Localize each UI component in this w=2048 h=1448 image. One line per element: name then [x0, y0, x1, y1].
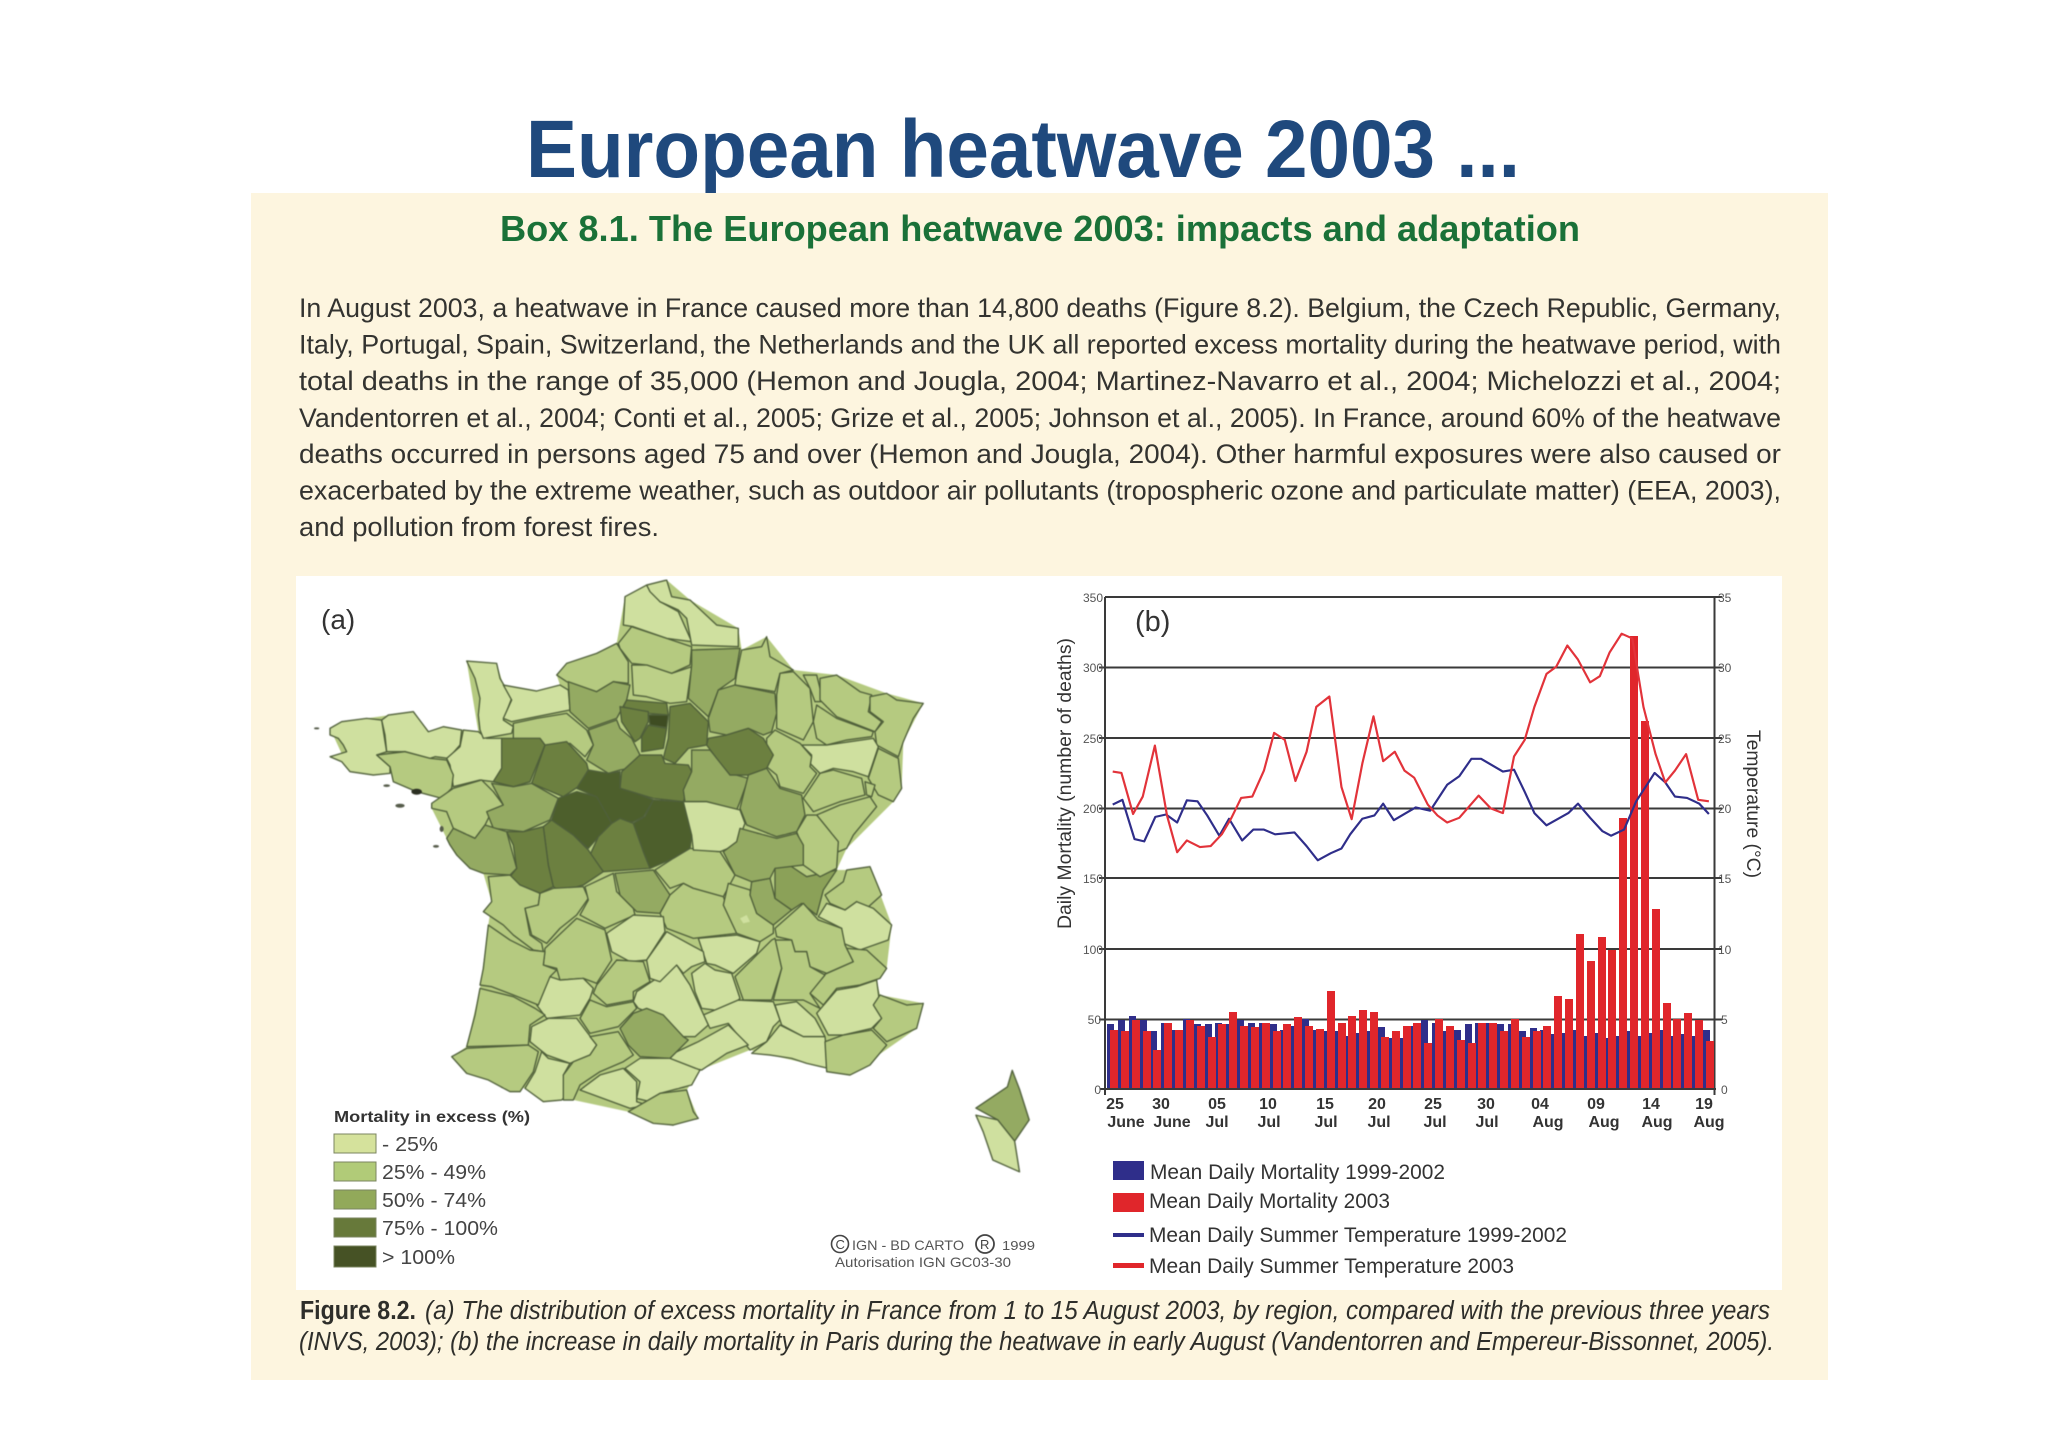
- x axis labels: 14: [1642, 1096, 1660, 1113]
- line: temperature 1999-2002: [1113, 759, 1709, 860]
- figure caption: [299, 1297, 1774, 1356]
- figure caption: (a) The distribution of excess mortality in France from 1 to 15 August 2003, by region, compared with the previous three years: [425, 1297, 1770, 1325]
- map of France: [314, 580, 1029, 1172]
- right axis tick labels: 20: [1718, 802, 1732, 816]
- copyright note: Autorisation IGN GC03-30: [835, 1254, 1011, 1270]
- x axis labels: Jul: [1367, 1114, 1391, 1131]
- x axis labels: 09: [1587, 1096, 1605, 1113]
- chart legend: Mean Daily Mortality 1999-2002: [1150, 1161, 1445, 1184]
- x axis labels: 25: [1424, 1096, 1442, 1113]
- copyright note: R: [980, 1237, 989, 1252]
- left axis tick labels: 0: [1094, 1083, 1101, 1097]
- panel: figure background: [296, 576, 1782, 1290]
- right axis tick labels: [1718, 591, 1732, 1097]
- x axis labels: Jul: [1423, 1114, 1447, 1131]
- x axis labels: Jul: [1475, 1114, 1499, 1131]
- x axis labels: June: [1107, 1114, 1145, 1131]
- bars: mean daily mortality 2003: [1110, 636, 1714, 1089]
- right axis tick labels: 25: [1718, 732, 1732, 746]
- copyright note: [832, 1235, 1035, 1270]
- body text: Vandentorren et al., 2004; Conti et al., 2005; Grize et al., 2005; Johnson et al., 2005). In France, around 60% of the heatwave: [299, 403, 1781, 433]
- right axis title: Temperature (°C): [1742, 730, 1763, 878]
- x axis labels: June: [1153, 1114, 1191, 1131]
- left axis tick labels: 150: [1083, 872, 1103, 886]
- x axis labels: 15: [1316, 1096, 1334, 1113]
- body text: In August 2003, a heatwave in France caused more than 14,800 deaths (Figure 8.2). Belgium, the Czech Republic, Germany,: [299, 293, 1781, 323]
- map legend: [334, 1109, 530, 1269]
- chart legend: Mean Daily Summer Temperature 2003: [1149, 1255, 1514, 1278]
- x axis labels: 30: [1477, 1096, 1495, 1113]
- x axis labels: Jul: [1257, 1114, 1281, 1131]
- box heading: Box 8.1. The European heatwave 2003: impacts and adaptation: [500, 208, 1580, 249]
- body text: deaths occurred in persons aged 75 and over (Hemon and Jougla, 2004). Other harmful exposures were also caused or: [299, 439, 1781, 469]
- chart legend: Mean Daily Mortality 2003: [1149, 1190, 1390, 1213]
- left axis tick labels: [1083, 591, 1103, 1097]
- panel label (a): (a): [321, 604, 355, 635]
- x axis labels: [1106, 1096, 1725, 1131]
- left axis tick labels: 50: [1088, 1013, 1101, 1027]
- x axis labels: 30: [1152, 1096, 1170, 1113]
- left axis tick labels: 350: [1083, 591, 1103, 605]
- line: temperature 2003: [1113, 634, 1709, 852]
- x axis labels: Jul: [1205, 1114, 1229, 1131]
- x axis labels: Aug: [1532, 1114, 1564, 1131]
- body text: total deaths in the range of 35,000 (Hemon and Jougla, 2004; Martinez-Navarro et al., 2004; Michelozzi et al., 2004;: [299, 366, 1781, 396]
- chart: daily mortality and temperature: [1055, 591, 1763, 1131]
- left axis tick labels: 250: [1083, 732, 1103, 746]
- body text: [299, 293, 1781, 542]
- x axis labels: 05: [1208, 1096, 1226, 1113]
- right axis tick labels: 35: [1718, 591, 1732, 605]
- map legend: 50% - 74%: [382, 1190, 486, 1212]
- x axis labels: Jul: [1314, 1114, 1338, 1131]
- body text: Italy, Portugal, Spain, Switzerland, the Netherlands and the UK all reported excess mortality during the heatwave period, with: [299, 330, 1781, 360]
- left axis tick labels: 300: [1083, 661, 1103, 675]
- copyright note: IGN - BD CARTO: [852, 1237, 964, 1253]
- copyright note: C: [836, 1237, 845, 1252]
- right axis tick labels: 5: [1721, 1013, 1728, 1027]
- body text: and pollution from forest fires.: [299, 512, 659, 542]
- left axis title: Daily Mortality (number of deaths): [1055, 638, 1076, 929]
- bars: mean daily mortality 1999-2002: [1107, 1016, 1710, 1089]
- map legend: 75% - 100%: [382, 1218, 498, 1240]
- x axis labels: Aug: [1588, 1114, 1620, 1131]
- right axis tick labels: 30: [1718, 661, 1732, 675]
- left axis tick labels: 200: [1083, 802, 1103, 816]
- title: European heatwave 2003 ...: [526, 104, 1520, 195]
- x axis labels: 20: [1368, 1096, 1386, 1113]
- x axis labels: Aug: [1641, 1114, 1673, 1131]
- right axis tick labels: 0: [1721, 1083, 1728, 1097]
- right axis tick labels: 10: [1718, 943, 1732, 957]
- x axis labels: Aug: [1693, 1114, 1725, 1131]
- figure caption: (INVS, 2003); (b) the increase in daily mortality in Paris during the heatwave in early August (Vandentorren and Empereur-Bissonnet, 2005).: [299, 1328, 1774, 1356]
- x axis labels: 10: [1259, 1096, 1277, 1113]
- x axis labels: 19: [1695, 1096, 1713, 1113]
- map legend: - 25%: [382, 1134, 438, 1156]
- panel: box background: [251, 193, 1828, 1380]
- map legend: > 100%: [382, 1247, 455, 1269]
- body text: exacerbated by the extreme weather, such as outdoor air pollutants (tropospheric ozone and particulate matter) (EEA, 2003),: [299, 476, 1781, 506]
- figure caption: Figure 8.2.: [300, 1297, 416, 1325]
- copyright note: 1999: [1002, 1238, 1035, 1253]
- x axis labels: 04: [1531, 1096, 1549, 1113]
- map legend: Mortality in excess (%): [334, 1109, 530, 1126]
- left axis tick labels: 100: [1083, 943, 1103, 957]
- panel label (b): (b): [1135, 606, 1170, 638]
- chart legend: [1113, 1161, 1567, 1278]
- baseline: [1100, 1088, 1716, 1090]
- map legend: 25% - 49%: [382, 1162, 486, 1184]
- gridlines and axes: [1099, 597, 1722, 1095]
- right axis tick labels: 15: [1718, 872, 1732, 886]
- chart legend: Mean Daily Summer Temperature 1999-2002: [1149, 1224, 1567, 1247]
- x axis labels: 25: [1106, 1096, 1124, 1113]
